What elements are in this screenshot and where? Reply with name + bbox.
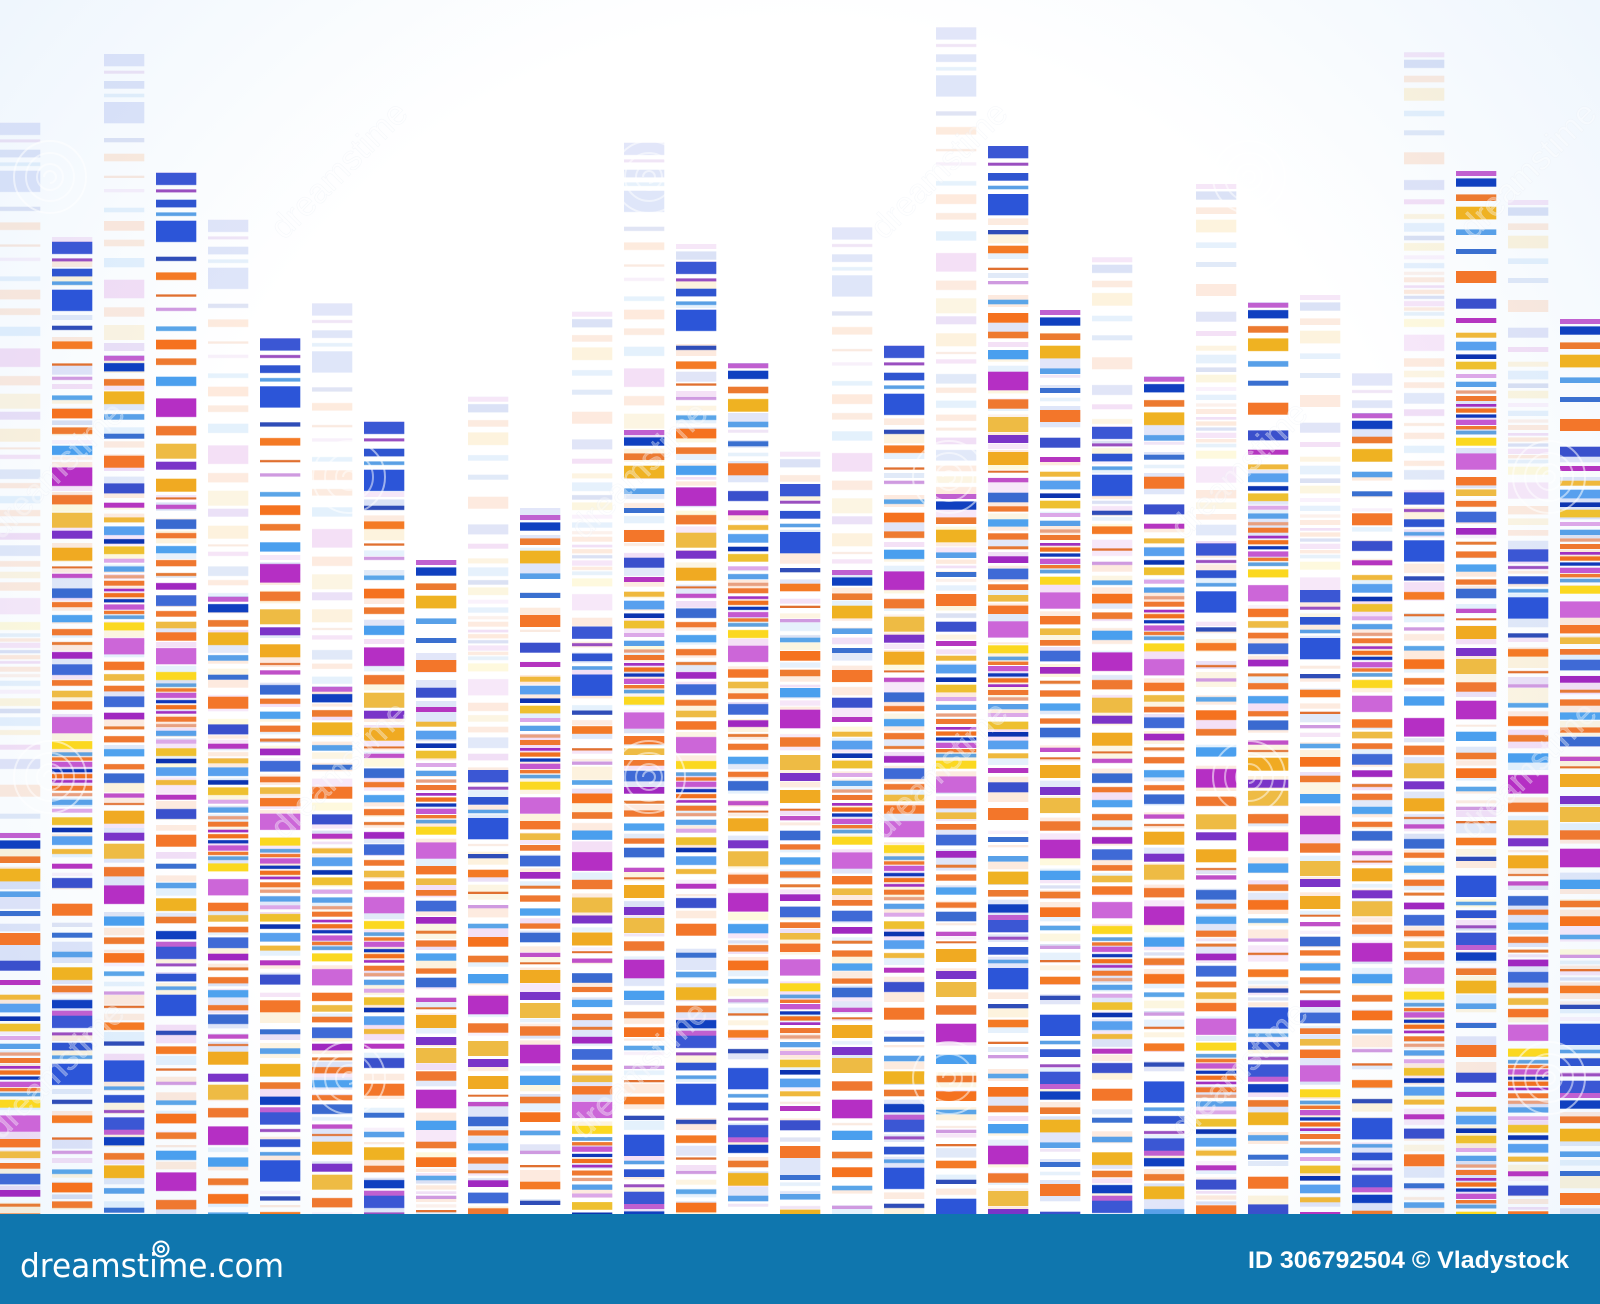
column 22 (1092, 257, 1132, 1214)
column 17 (832, 227, 872, 1214)
column 20 (988, 146, 1028, 1214)
column 5 (208, 220, 248, 1214)
image id and credit: ID 306792504 © Vladystock (1248, 1247, 1570, 1274)
column 13 (624, 143, 664, 1214)
column 27 (1352, 373, 1392, 1214)
column 12 (572, 312, 612, 1214)
column 24 (1196, 184, 1236, 1214)
column 31 (1560, 319, 1600, 1214)
watermark text: dreamstime (563, 994, 715, 1146)
watermark spirals (14, 141, 1585, 1114)
column 2 (52, 237, 92, 1214)
watermark text: dreamstime (263, 94, 415, 246)
watermark text: dreamstime (1163, 394, 1315, 546)
column 8 (364, 422, 404, 1214)
column 9 (416, 560, 456, 1214)
footer banner (0, 1214, 1600, 1304)
watermark text: dreamstime (263, 694, 415, 846)
column 3 (104, 54, 144, 1214)
watermark text: dreamstime (1163, 994, 1315, 1146)
logo wordmark: dreamstime.com (20, 1246, 284, 1285)
column 11 (520, 508, 560, 1214)
column 14 (676, 244, 716, 1214)
column 4 (156, 173, 196, 1214)
column 16 (780, 452, 820, 1214)
column 28 (1404, 52, 1444, 1214)
watermark text: dreamstime (1452, 94, 1600, 246)
column 23 (1144, 377, 1184, 1214)
column 15 (728, 363, 768, 1214)
watermark text: dreamstime (563, 394, 715, 546)
watermark text: dreamstime (863, 694, 1015, 846)
column 6 (260, 338, 300, 1214)
column 10 (468, 397, 508, 1214)
column 21 (1040, 310, 1080, 1214)
column 7 (312, 303, 352, 1214)
column 26 (1300, 295, 1340, 1214)
column 30 (1508, 200, 1548, 1214)
column 18 (884, 346, 924, 1214)
watermark text: dreamstime (1452, 694, 1600, 846)
icon: logo spiral (154, 1242, 168, 1256)
watermark text: dreamstime (863, 94, 1015, 246)
column 1 (0, 123, 40, 1214)
column 19 (936, 27, 976, 1214)
column 29 (1456, 171, 1496, 1214)
column 25 (1248, 303, 1288, 1214)
